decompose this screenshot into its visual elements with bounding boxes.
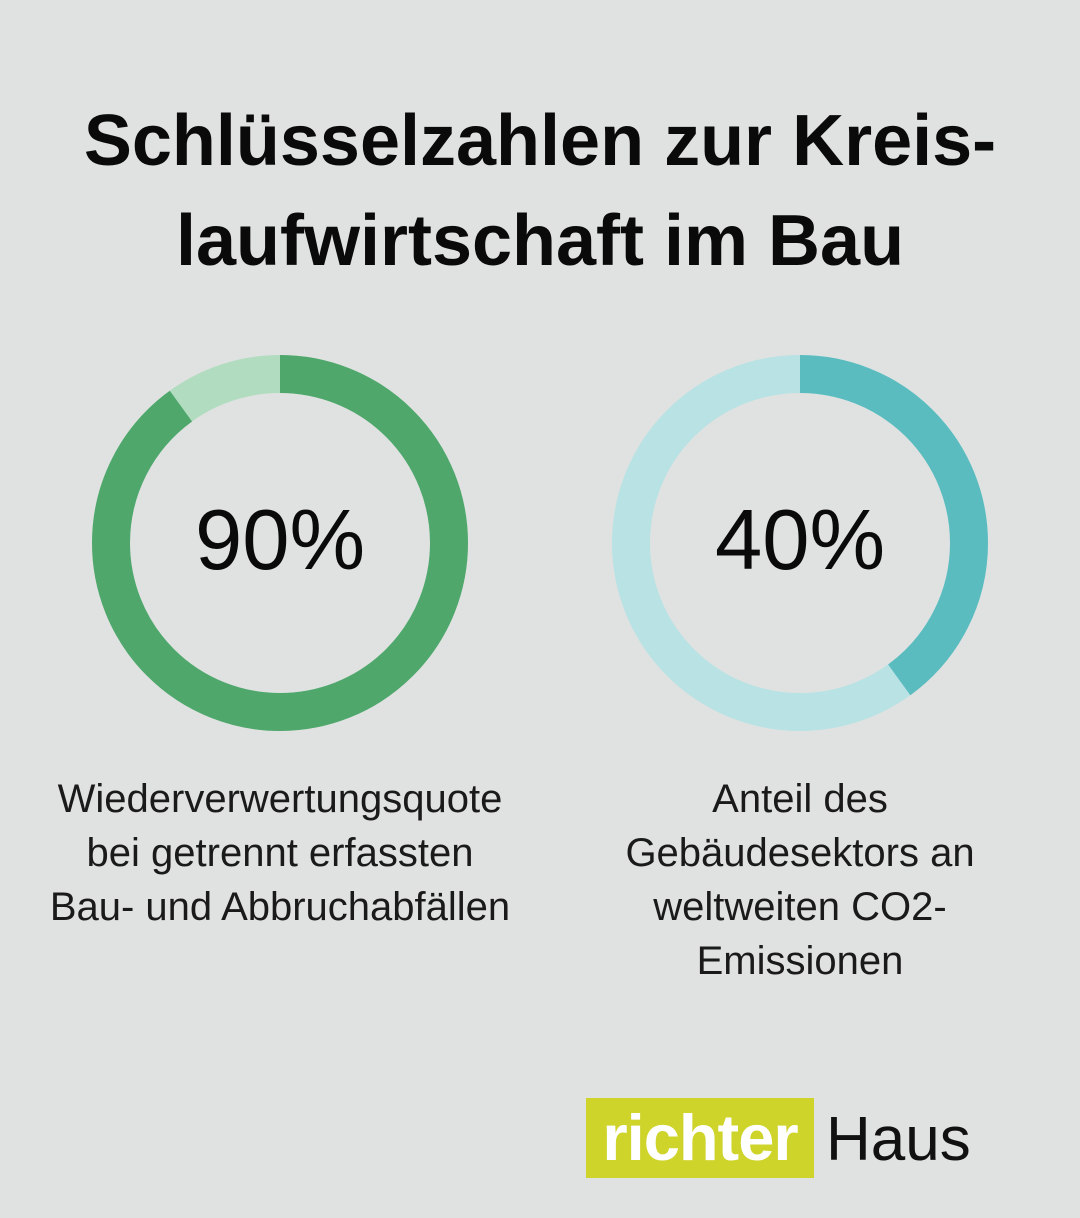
caption: recycling rate: bei getrennt erfassten [87,831,473,875]
caption: recycling rate [50,777,510,929]
caption: CO2 share: Anteil des [712,777,888,821]
number: 90%: 90% [195,493,365,588]
caption: CO2 share [625,777,975,983]
title: Schlüsselzahlen zur Kreis- [84,101,996,181]
caption: CO2 share: Gebäudesektors an [625,831,975,875]
title [84,101,996,281]
caption: recycling rate: Wiederverwertungsquote [58,777,502,821]
caption: CO2 share: Emissionen [697,939,903,983]
chart: 40% donut [612,355,988,731]
number: 40%: 40% [715,493,885,588]
chart: 90% donut [92,355,468,731]
title: laufwirtschaft im Bau [176,201,904,281]
logo text: Haus [826,1105,971,1174]
logo box: richter [602,1101,798,1174]
caption: recycling rate: Bau- und Abbruchabfällen [50,885,510,929]
caption: CO2 share: weltweiten CO2- [653,885,947,929]
logo: richter Haus [586,1098,971,1178]
